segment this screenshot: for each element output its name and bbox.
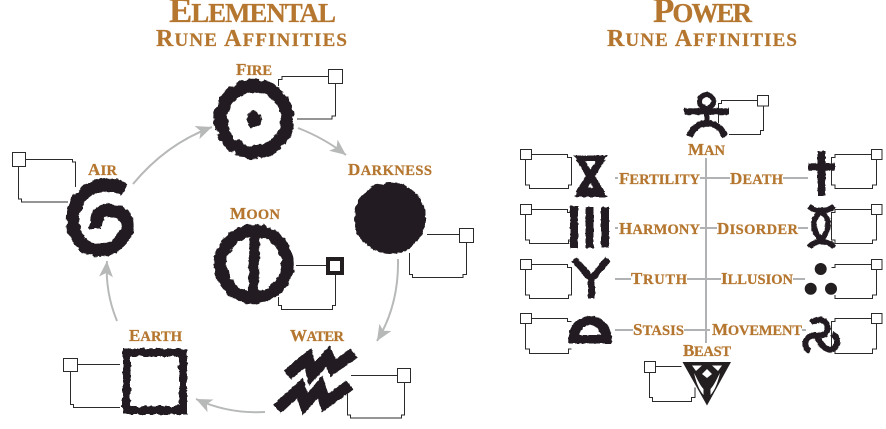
label: Stasis: STASIS (633, 320, 684, 339)
subheading: Rune Affinities: RUNE AFFINITIES (607, 26, 797, 52)
label: Man: MAN (688, 140, 726, 159)
label: Air: AIR (88, 160, 118, 179)
label: Fire: FIRE (236, 60, 272, 79)
icon: fire rune (214, 78, 294, 160)
icon: water rune (277, 353, 354, 409)
rune group: moon (220, 204, 342, 310)
icon: truth rune (574, 259, 608, 298)
write-in box: fertility (520, 150, 572, 188)
label: Harmony: HARMONY (619, 219, 701, 238)
write-in box: death (832, 150, 882, 188)
arrow: darkness to water (377, 259, 398, 341)
label: Illusion: ILLUSION (721, 269, 794, 288)
icon: moon rune (220, 230, 288, 298)
write-in box: stasis (520, 314, 572, 354)
panel: elemental rune affinities (12, 0, 474, 418)
write-in box: illusion (832, 260, 882, 298)
rune group: beast (644, 341, 731, 406)
rune group: darkness (348, 160, 474, 278)
label: Darkness: DARKNESS (348, 160, 432, 179)
icon: harmony rune (574, 206, 605, 248)
panel: power rune affinities (520, 0, 882, 406)
rune group: air (12, 152, 127, 250)
rune group: death (730, 150, 882, 196)
arrow: water to earth (196, 399, 265, 412)
write-in box: earth (64, 358, 120, 408)
icon: air rune (73, 185, 127, 250)
icon: man rune (684, 94, 729, 136)
icon: beast rune (682, 362, 731, 406)
label: Moon: MOON (230, 204, 281, 223)
label: Water: WATER (290, 326, 345, 345)
icon: darkness rune (352, 180, 428, 256)
write-in box: movement (832, 314, 882, 354)
arrow: fire to darkness (298, 128, 346, 155)
write-in box: darkness (410, 228, 474, 278)
label: Beast: BEAST (683, 341, 731, 360)
rune group: truth (520, 259, 688, 298)
arrow: earth to air (107, 261, 117, 321)
rune group: illusion (721, 260, 882, 298)
write-in box: truth (520, 260, 572, 298)
label: Earth: EARTH (129, 326, 183, 345)
write-in box: fire (278, 70, 342, 119)
icon: disorder rune (809, 206, 834, 247)
write-in box: air (12, 152, 76, 202)
label: Disorder: DISORDER (717, 219, 799, 238)
write-in box: water (348, 368, 410, 418)
icon: stasis rune (568, 316, 612, 344)
icon: earth rune (126, 352, 183, 410)
central axis connecting Man and Beast (705, 158, 707, 343)
label: Fertility: FERTILITY (619, 169, 701, 188)
icon: fertility rune (573, 156, 608, 197)
rune group: fire (214, 60, 342, 160)
rune group: disorder (717, 204, 882, 247)
rune group: man (684, 94, 768, 159)
write-in box: disorder (832, 204, 882, 244)
write-in box: moon (278, 259, 342, 310)
connector lines from runes to axis (615, 178, 808, 330)
label: Death: DEATH (730, 169, 784, 188)
arrow: air to fire (133, 127, 212, 184)
write-in box: man (718, 96, 768, 134)
write-in box: harmony (520, 204, 572, 244)
rune group: water (277, 326, 410, 418)
label: Truth: TRUTH (631, 269, 688, 288)
rune group: stasis (520, 314, 684, 354)
label: Movement: MOVEMENT (712, 320, 802, 339)
rune group: harmony (520, 204, 701, 248)
write-in box: beast (644, 362, 695, 402)
subheading: Rune Affinities: RUNE AFFINITIES (156, 26, 347, 52)
icon: movement rune (805, 320, 837, 351)
rune group: earth (64, 326, 183, 410)
rune group: fertility (520, 150, 701, 197)
icon: illusion rune (805, 263, 837, 295)
rune group: movement (712, 314, 882, 354)
icon: death rune (808, 151, 835, 196)
